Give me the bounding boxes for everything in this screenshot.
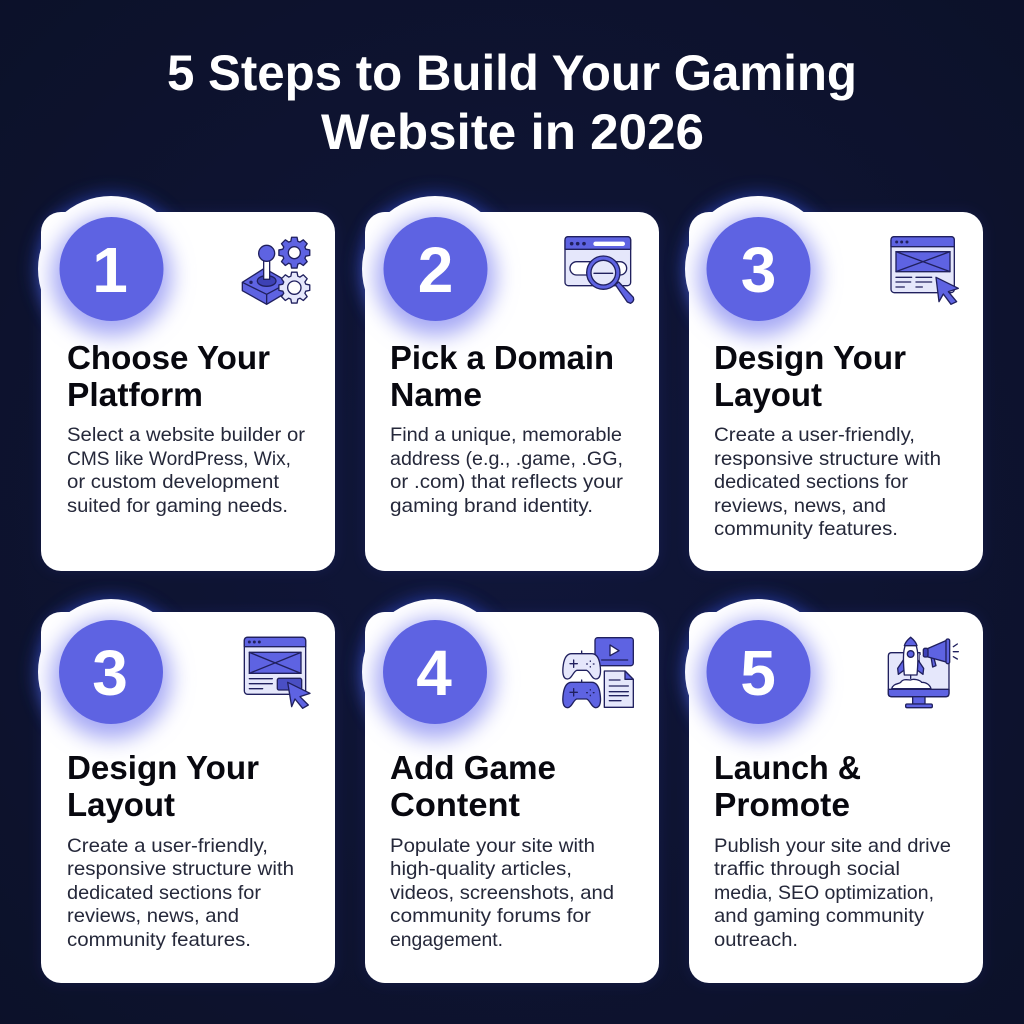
title: 5 Steps to Build Your Gaming bbox=[167, 45, 857, 101]
description: dedicated sections for bbox=[714, 471, 909, 493]
description: and gaming community bbox=[714, 905, 924, 927]
description: community forums for bbox=[390, 905, 592, 927]
description: Create a user-friendly, bbox=[67, 835, 268, 857]
description bbox=[714, 835, 951, 951]
description: dedicated sections for bbox=[67, 882, 262, 904]
title: Website in 2026 bbox=[321, 104, 704, 160]
number badge 3 bbox=[706, 217, 810, 321]
heading: Layout bbox=[67, 786, 175, 823]
description: responsive structure with bbox=[714, 448, 941, 470]
description: responsive structure with bbox=[67, 858, 294, 880]
number badge 5 bbox=[706, 620, 810, 724]
heading: Layout bbox=[714, 376, 822, 413]
heading bbox=[390, 749, 556, 823]
icon: browser with magnifier bbox=[565, 237, 634, 303]
heading: Pick a Domain bbox=[390, 339, 614, 376]
description: outreach. bbox=[714, 929, 798, 951]
heading: Choose Your bbox=[67, 339, 270, 376]
description bbox=[67, 424, 306, 517]
description: Create a user-friendly, bbox=[714, 424, 915, 446]
description: or custom development bbox=[67, 471, 280, 493]
heading: Add Game bbox=[390, 749, 556, 786]
heading bbox=[714, 339, 906, 413]
icon: rocket, monitor and megaphone bbox=[888, 637, 958, 708]
description: engagement. bbox=[390, 929, 503, 951]
description: Select a website builder or bbox=[67, 424, 306, 446]
description: CMS like WordPress, Wix, bbox=[67, 448, 291, 470]
description: Publish your site and drive bbox=[714, 835, 951, 857]
panel: step 3 design your layout bbox=[683, 194, 983, 571]
number badge 3 bbox=[59, 620, 163, 724]
description: traffic through social bbox=[714, 858, 900, 880]
description bbox=[390, 835, 614, 951]
icon: joystick and gears bbox=[242, 237, 310, 304]
heading: Launch & bbox=[714, 749, 861, 786]
number badge 3: 3 bbox=[741, 234, 776, 306]
panel: step 1 choose your platform bbox=[36, 194, 335, 571]
description: reviews, news, and bbox=[67, 905, 239, 927]
description: address (e.g., .game, .GG, bbox=[390, 448, 623, 470]
description bbox=[390, 424, 624, 517]
description: community features. bbox=[67, 929, 251, 951]
description: high-quality articles, bbox=[390, 858, 572, 880]
number badge 2 bbox=[384, 217, 488, 321]
number badge 3: 3 bbox=[92, 637, 128, 709]
description: videos, screenshots, and bbox=[390, 882, 614, 904]
number badge 1: 1 bbox=[92, 234, 128, 306]
icon: wireframe window with cursor bbox=[891, 237, 958, 304]
description: gaming brand identity. bbox=[390, 495, 593, 517]
icon: gamepads, video and document bbox=[563, 638, 633, 708]
heading: Name bbox=[390, 376, 482, 413]
number badge 2: 2 bbox=[418, 234, 453, 306]
description: Find a unique, memorable bbox=[390, 424, 622, 446]
description bbox=[714, 424, 941, 540]
heading bbox=[67, 749, 259, 823]
heading bbox=[390, 339, 614, 413]
panel: step 3 design your layout (repeat) bbox=[36, 597, 335, 983]
heading: Promote bbox=[714, 786, 850, 823]
title bbox=[167, 45, 857, 160]
description: media, SEO optimization, bbox=[714, 882, 934, 904]
heading bbox=[714, 749, 861, 823]
description: suited for gaming needs. bbox=[67, 495, 288, 517]
panel: step 4 add game content bbox=[360, 597, 659, 983]
heading: Content bbox=[390, 786, 520, 823]
icon: wireframe window with button and cursor bbox=[244, 637, 310, 708]
number badge 4 bbox=[383, 620, 487, 724]
heading: Platform bbox=[67, 376, 203, 413]
heading: Design Your bbox=[67, 749, 259, 786]
number badge 4: 4 bbox=[416, 637, 452, 709]
description: reviews, news, and bbox=[714, 495, 886, 517]
panel: step 2 pick a domain name bbox=[360, 194, 659, 571]
number badge 5: 5 bbox=[740, 637, 776, 709]
description: Populate your site with bbox=[390, 835, 595, 857]
panel: step 5 launch and promote bbox=[683, 597, 983, 983]
number badge 1 bbox=[60, 217, 164, 321]
heading: Design Your bbox=[714, 339, 906, 376]
heading bbox=[67, 339, 270, 413]
description: or .com) that reflects your bbox=[390, 471, 624, 493]
description bbox=[67, 835, 294, 951]
description: community features. bbox=[714, 518, 898, 540]
